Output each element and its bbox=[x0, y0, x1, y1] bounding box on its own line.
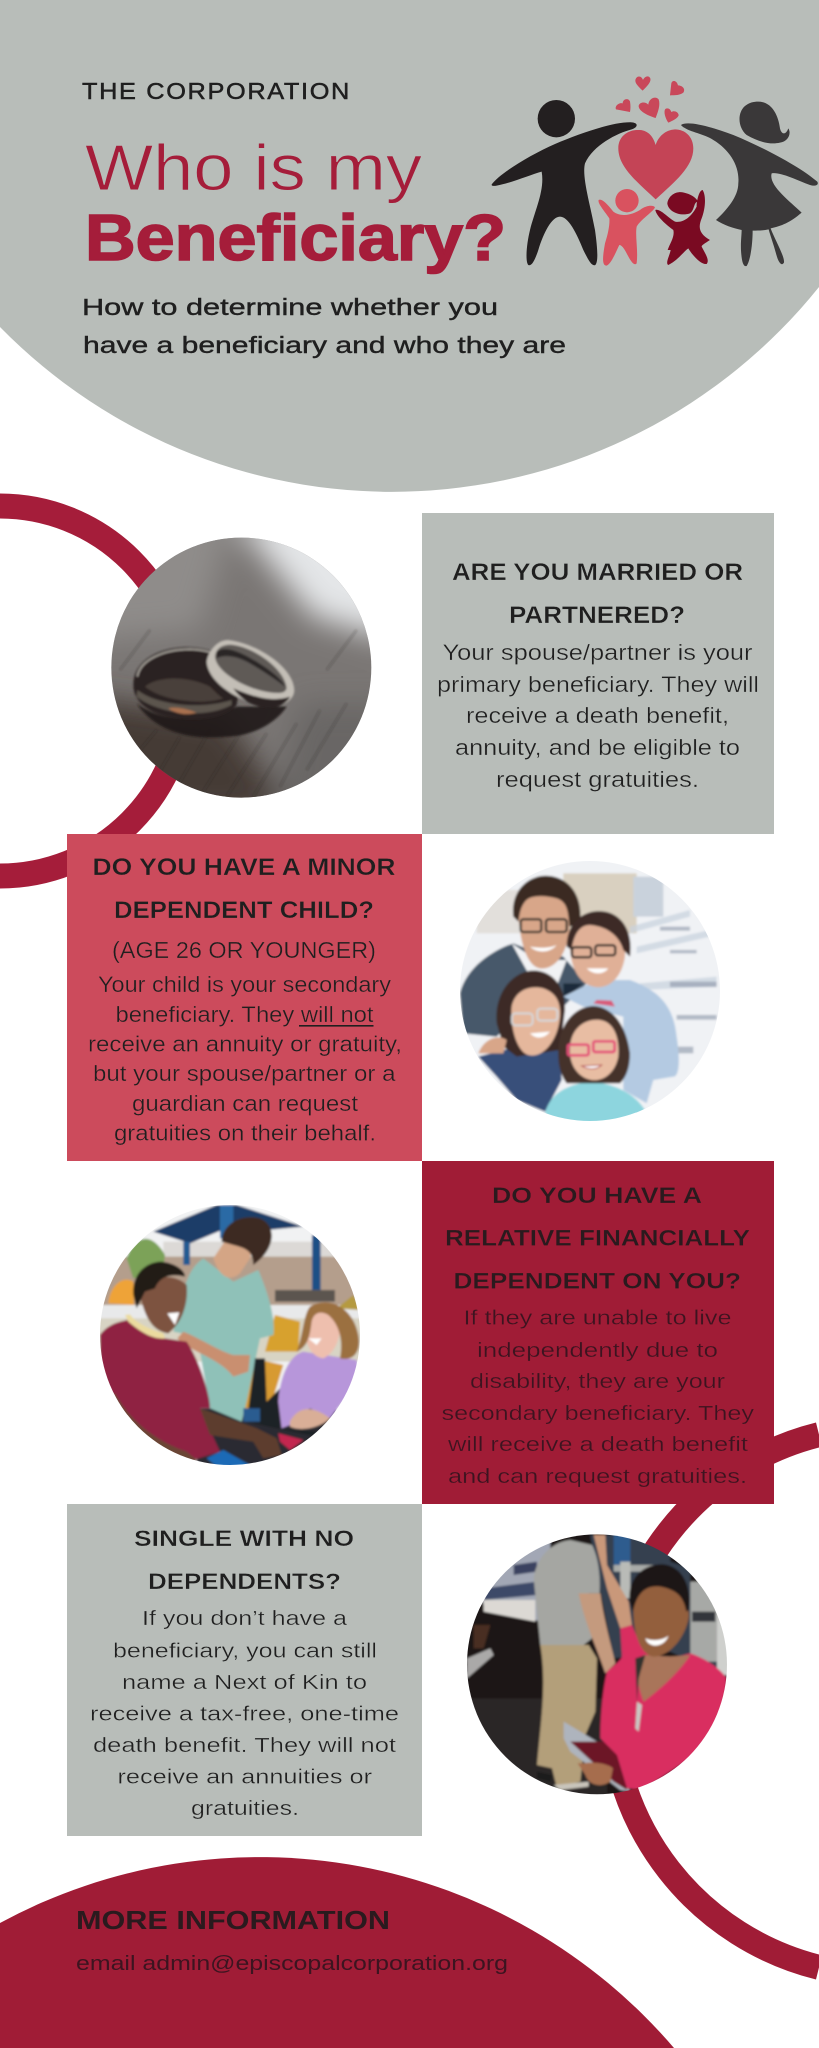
heading: financially dependent relative: DEPENDENT ON YOU? bbox=[454, 1269, 741, 1294]
heading: married or partnered: PARTNERED? bbox=[509, 602, 685, 629]
subtitle: How to determine whether you bbox=[82, 294, 498, 320]
footer heading: MORE INFORMATION bbox=[76, 1905, 390, 1935]
title: Beneficiary? bbox=[85, 201, 506, 274]
body text: minor dependent child: Your child is your secondary bbox=[98, 972, 391, 997]
decorative ring bottom right bbox=[611, 1435, 819, 1967]
eyebrow: the corporation: THE CORPORATION bbox=[82, 78, 351, 104]
body text: married or partnered: receive a death benefit, bbox=[466, 703, 729, 728]
panel: financially dependent relative bbox=[422, 1161, 774, 1504]
heading: financially dependent relative: RELATIVE FINANCIALLY bbox=[445, 1226, 750, 1251]
body text: minor dependent child: receive an annuity or gratuity, bbox=[88, 1032, 402, 1057]
subtitle: have a beneficiary and who they are bbox=[83, 332, 566, 358]
tablet bbox=[564, 1722, 630, 1792]
woman bbox=[600, 1625, 726, 1790]
body text: financially dependent relative: will receive a death benefit bbox=[447, 1434, 749, 1456]
body text: single with no dependents: receive a tax-free, one-time bbox=[90, 1704, 399, 1726]
panel: single with no dependents bbox=[67, 1504, 422, 1836]
heading: financially dependent relative bbox=[445, 1183, 750, 1294]
girl bbox=[655, 190, 710, 265]
heading: minor dependent child: DO YOU HAVE A MINOR bbox=[92, 854, 396, 881]
small hearts bbox=[616, 76, 684, 123]
body text: single with no dependents: death benefit. They will not bbox=[93, 1735, 397, 1757]
decorative ring top left bbox=[0, 506, 185, 876]
panel: minor dependent child bbox=[67, 834, 422, 1161]
boy bbox=[599, 189, 655, 266]
body text: single with no dependents bbox=[90, 1608, 399, 1820]
body text: minor dependent child bbox=[88, 972, 402, 1146]
heading: married or partnered: ARE YOU MARRIED OR bbox=[452, 559, 743, 586]
body text: single with no dependents: name a Next of Kin to bbox=[122, 1672, 367, 1694]
subtitle bbox=[82, 294, 566, 358]
footer contact email: email admin@episcopalcorporation.org bbox=[76, 1953, 508, 1975]
girl 2 bbox=[544, 1082, 646, 1121]
left person bbox=[100, 1320, 220, 1462]
mother bbox=[563, 980, 679, 1103]
age note: (AGE 26 OR YOUNGER) bbox=[112, 937, 376, 963]
man bbox=[534, 1540, 600, 1645]
body text: single with no dependents: beneficiary, you can still bbox=[113, 1640, 377, 1662]
body text: married or partnered bbox=[437, 640, 759, 792]
heading: single with no dependents: SINGLE WITH NO bbox=[134, 1526, 354, 1551]
body text: married or partnered: primary beneficiary. They will bbox=[437, 672, 759, 697]
heading: financially dependent relative: DO YOU HAVE A bbox=[492, 1183, 702, 1208]
icon: family with hearts bbox=[492, 76, 818, 266]
girl 1 bbox=[478, 1047, 562, 1112]
right person bbox=[278, 1352, 360, 1428]
middle person bbox=[173, 1258, 274, 1422]
body text: minor dependent child: but your spouse/partner or a bbox=[93, 1061, 396, 1086]
footer dome bbox=[0, 1857, 674, 2048]
body text: married or partnered: annuity, and be eligible to bbox=[455, 735, 740, 760]
body text: single with no dependents: If you don’t have a bbox=[142, 1608, 348, 1630]
body text: financially dependent relative: secondary beneficiary. They bbox=[442, 1403, 754, 1425]
body text: single with no dependents: receive an annuities or bbox=[118, 1766, 372, 1788]
photo: family with glasses bbox=[460, 861, 720, 1121]
body text: financially dependent relative: independently due to bbox=[477, 1340, 718, 1362]
big heart bbox=[618, 129, 693, 199]
father bbox=[492, 100, 637, 265]
body text: financially dependent relative: If they are unable to live bbox=[464, 1308, 732, 1330]
mother bbox=[681, 102, 818, 266]
title: Who is my bbox=[85, 131, 423, 204]
heading: married or partnered bbox=[452, 559, 743, 629]
heading: single with no dependents bbox=[134, 1526, 354, 1594]
body text: minor dependent child: beneficiary. They will not bbox=[116, 1002, 374, 1027]
title bbox=[85, 131, 506, 274]
header background circle bbox=[0, 0, 819, 492]
body text: married or partnered: Your spouse/partner is your bbox=[442, 640, 752, 665]
body text: financially dependent relative: disability, they are your bbox=[470, 1371, 725, 1393]
photo: friends laughing outdoors bbox=[100, 1205, 360, 1465]
body text: married or partnered: request gratuities. bbox=[496, 767, 699, 792]
photo: woman in pink at the gym bbox=[467, 1534, 727, 1794]
body text: minor dependent child: gratuities on their behalf. bbox=[114, 1120, 376, 1146]
body text: single with no dependents: gratuities. bbox=[191, 1798, 299, 1820]
photo: wedding rings bbox=[111, 538, 372, 798]
wheelchair bbox=[247, 1358, 317, 1437]
rings shadow bbox=[137, 703, 287, 737]
body text: minor dependent child: guardian can request bbox=[132, 1091, 358, 1116]
heading: minor dependent child: DEPENDENT CHILD? bbox=[114, 897, 374, 924]
panel: married or partnered bbox=[422, 513, 774, 834]
father bbox=[460, 943, 587, 1037]
heading: single with no dependents: DEPENDENTS? bbox=[148, 1569, 341, 1594]
body text: financially dependent relative bbox=[442, 1308, 754, 1488]
heading: minor dependent child bbox=[92, 854, 396, 924]
body text: financially dependent relative: and can request gratuities. bbox=[448, 1466, 747, 1488]
